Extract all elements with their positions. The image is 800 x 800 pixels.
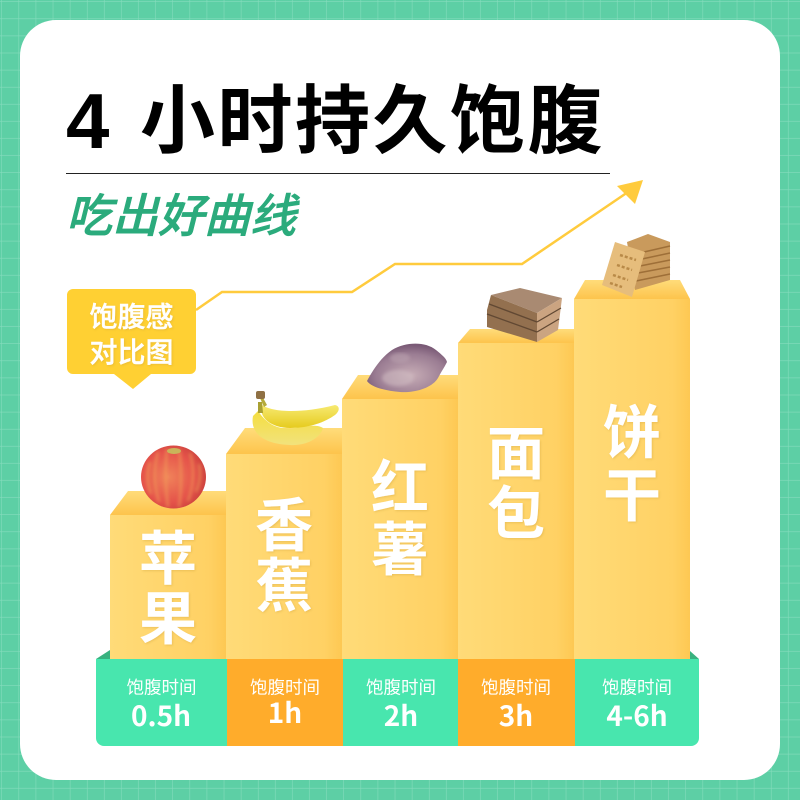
callout: fullness comparison: 饱腹感 [89, 296, 174, 336]
column: apple: 果 [139, 572, 197, 656]
column: apple [110, 491, 226, 659]
column: sweet potato: 薯 [371, 503, 429, 587]
column: bread [458, 329, 574, 659]
icon: banana [253, 391, 339, 445]
icon: sweet potato [367, 344, 447, 392]
callout: fullness comparison: 对比图 [89, 331, 174, 371]
time band [96, 659, 699, 746]
column: biscuit [574, 280, 690, 659]
subtitle: 吃出好曲线 [66, 180, 300, 246]
column: biscuit: 饼 [603, 386, 661, 470]
cell: banana time: 饱腹时间 [250, 674, 320, 700]
cell: bread time: 饱腹时间 [481, 674, 551, 700]
column: apple: 苹 [139, 512, 197, 596]
icon: biscuit [602, 234, 670, 297]
base shadow corners [96, 650, 699, 659]
cell: biscuit time: 4-6h [606, 695, 668, 735]
column: biscuit: 干 [603, 449, 661, 533]
cell: biscuit time: 饱腹时间 [602, 674, 672, 700]
cell: sweet potato time: 2h [384, 695, 418, 735]
cell: apple time [126, 674, 196, 735]
arrow: rising trend [196, 180, 643, 310]
cell: banana time [250, 674, 320, 732]
cell: banana time: 1h [268, 692, 302, 732]
column: banana: 香 [255, 479, 313, 563]
callout: fullness comparison [67, 289, 196, 389]
column: banana [226, 428, 342, 659]
cell: apple time: 0.5h [131, 695, 191, 735]
column: sweet potato [342, 375, 458, 659]
column: bread: 包 [487, 467, 545, 551]
cell: sweet potato time [366, 674, 436, 735]
column: bread: 面 [487, 407, 545, 491]
icon: apple [141, 446, 206, 508]
cell: biscuit time [602, 674, 672, 735]
icon: bread [487, 288, 562, 342]
column: banana: 蕉 [255, 539, 313, 623]
title: 小时持久饱腹 [140, 60, 605, 169]
cell: bread time: 3h [499, 695, 533, 735]
cell: sweet potato time: 饱腹时间 [366, 674, 436, 700]
cell: bread time [481, 674, 551, 735]
column: sweet potato: 红 [371, 441, 429, 525]
cell: apple time: 饱腹时间 [126, 674, 196, 700]
title: 4 [66, 77, 109, 165]
